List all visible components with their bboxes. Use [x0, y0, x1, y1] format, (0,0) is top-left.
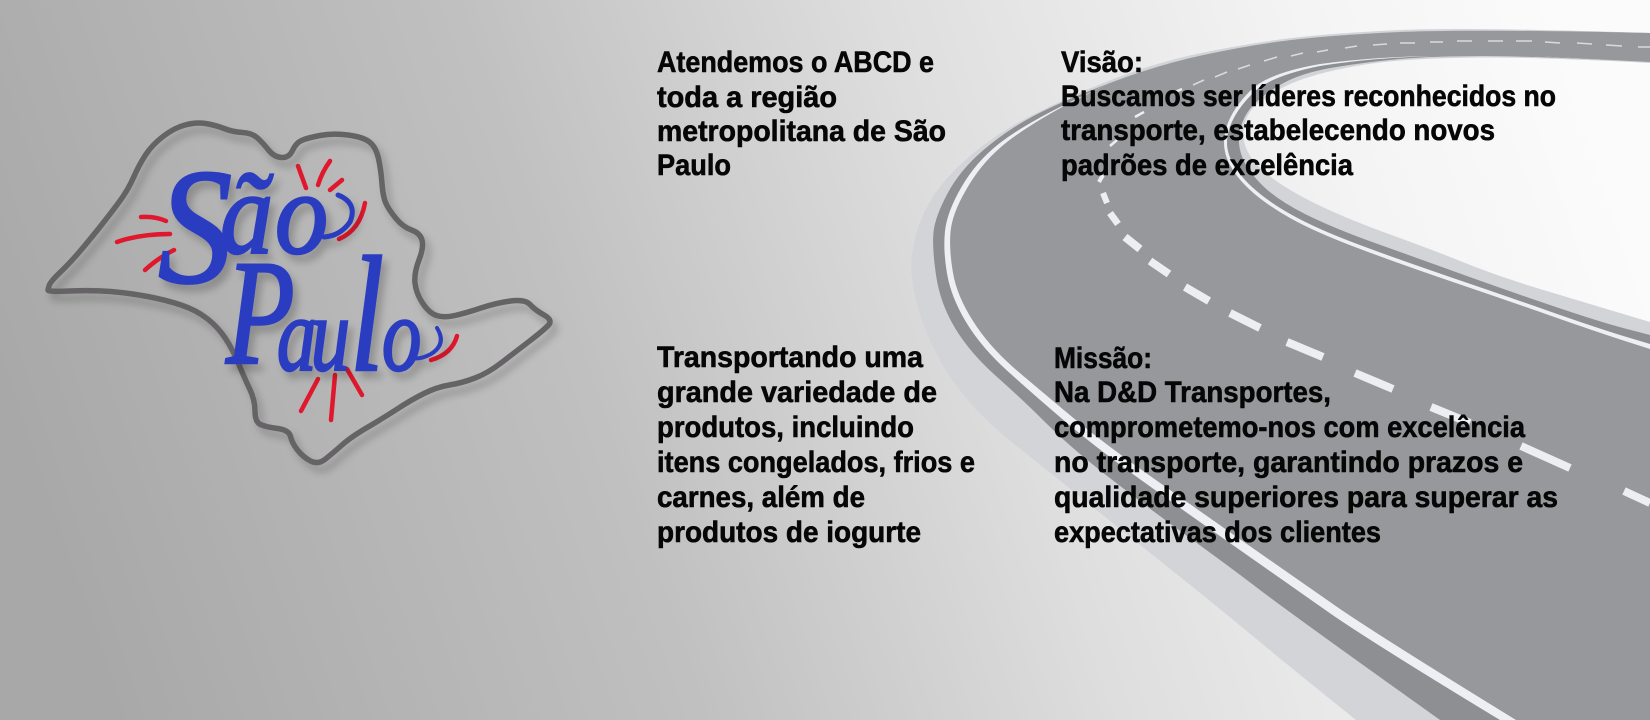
text block: service area: Atendemos o ABCD e: [657, 46, 934, 79]
text block: products transported: carnes, além de: [657, 481, 865, 514]
text block: mission: Na D&D Transportes,: [1054, 376, 1331, 409]
text block: products transported: [657, 341, 975, 549]
text block: vision: padrões de excelência: [1061, 149, 1353, 182]
road illustration: [911, 29, 1650, 720]
red accent strokes: [117, 161, 457, 420]
lettering word: Paulo: l: [350, 223, 384, 406]
lettering word: Paulo: u: [311, 277, 350, 394]
text block: vision: transporte, estabelecendo novos: [1061, 114, 1495, 147]
text block: products transported: Transportando uma: [657, 341, 923, 374]
text block: vision: Buscamos ser líderes reconhecidos no: [1061, 80, 1556, 113]
text block: service area: metropolitana de São: [657, 115, 946, 148]
lettering word: São: o: [275, 149, 328, 279]
text block: mission: qualidade superiores para superar as: [1054, 481, 1558, 514]
lettering word: São: ã: [220, 149, 273, 279]
text block: products transported: itens congelados, frios e: [657, 446, 975, 479]
text block: mission: expectativas dos clientes: [1054, 516, 1381, 549]
text block: products transported: produtos de iogurte: [657, 516, 921, 549]
road white edge lines: [944, 31, 1650, 720]
text block: mission: [1054, 342, 1558, 549]
text block: service area: toda a região: [657, 81, 837, 114]
dashed centre line: [1099, 41, 1650, 503]
text block: mission: comprometemo-nos com excelência: [1054, 411, 1525, 444]
text block: mission: no transporte, garantindo prazos e: [1054, 446, 1523, 479]
lettering word: São: S: [158, 135, 232, 318]
lettering: São Paulo: [158, 135, 441, 406]
road surface: [950, 31, 1650, 720]
text block: mission: Missão:: [1054, 342, 1152, 375]
state outline: [48, 123, 550, 463]
lettering swash on Paulo: [410, 328, 441, 358]
road edge band: [933, 31, 1650, 720]
lettering word: Paulo: P: [225, 229, 295, 396]
text block: service area: Paulo: [657, 149, 731, 182]
lettering word: Paulo: o: [382, 277, 421, 394]
lettering swash on São: [324, 195, 352, 237]
text block: products transported: grande variedade de: [657, 376, 937, 409]
text block: vision: [1061, 46, 1556, 182]
text block: vision: Visão:: [1061, 46, 1143, 79]
São Paulo state map with lettering: [48, 123, 550, 463]
road light shoulder: [911, 29, 1650, 720]
lettering word: Paulo: a: [277, 277, 316, 394]
text block: products transported: produtos, incluindo: [657, 411, 914, 444]
text block: service area: [657, 46, 946, 182]
